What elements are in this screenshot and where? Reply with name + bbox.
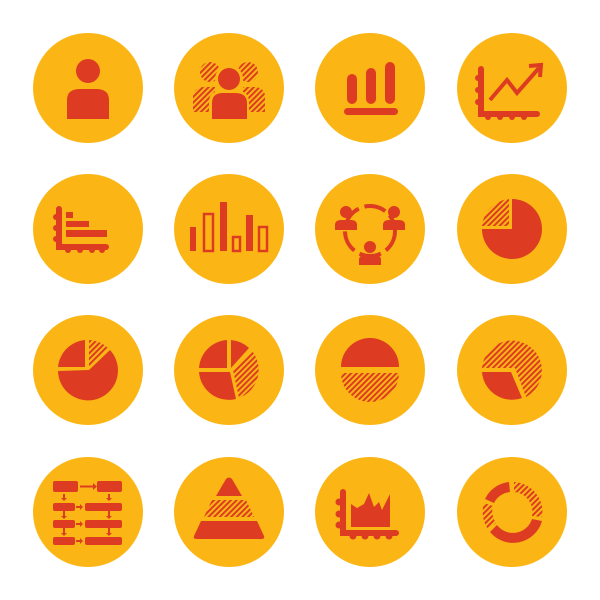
icon: line chart xyxy=(457,33,567,143)
icon: flowchart xyxy=(33,457,143,567)
icon: pyramid xyxy=(174,457,284,567)
icon: pie quarter xyxy=(457,174,567,284)
icon: pie 4 xyxy=(457,315,567,425)
icon: network people xyxy=(315,174,425,284)
icon: pie 3 xyxy=(174,315,284,425)
icon: half circle xyxy=(315,315,425,425)
icon: person xyxy=(33,33,143,143)
icon: horizontal bars xyxy=(33,174,143,284)
icon: pie 2 xyxy=(33,315,143,425)
icon: donut xyxy=(457,457,567,567)
icon: bar chart xyxy=(315,33,425,143)
icon: group xyxy=(174,33,284,143)
icon: column chart xyxy=(174,174,284,284)
icon: area chart xyxy=(315,457,425,567)
